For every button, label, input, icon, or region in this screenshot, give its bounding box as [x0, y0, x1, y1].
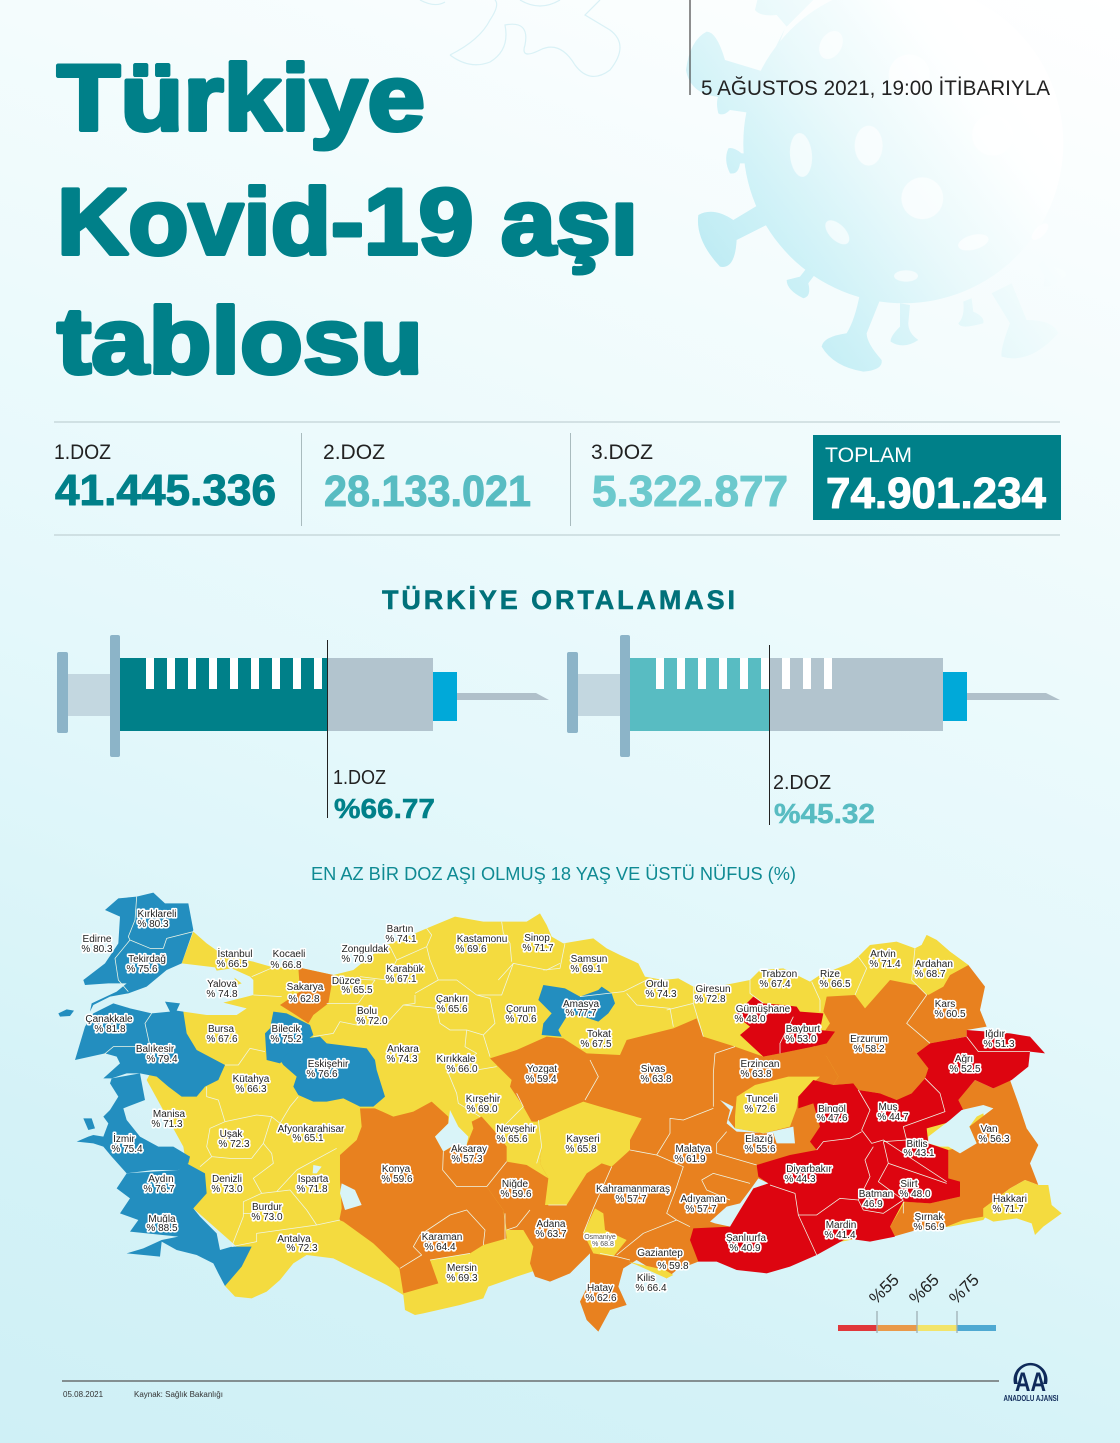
map: province labels west: % 67.1	[385, 974, 417, 985]
map: province labels west: Balıkesir	[136, 1044, 175, 1055]
map: blue provinces west (over 75%)	[58, 893, 385, 1286]
map: province labels west: % 70.6	[505, 1014, 537, 1025]
map: province labels west: % 69.0	[466, 1104, 498, 1115]
map: province labels west: % 59.6	[381, 1174, 413, 1185]
map: province labels east: % 56.3	[978, 1134, 1010, 1145]
map: province labels west: % 79.4	[146, 1054, 178, 1065]
map: province labels west: % 66.0	[446, 1064, 478, 1075]
map: province labels east: Şanlıurfa	[726, 1233, 766, 1244]
dose 2 percentage callout: 2.DOZ	[773, 772, 831, 794]
map: province labels west: Afyonkarahisar	[278, 1124, 345, 1135]
map: province labels west: % 81.8	[94, 1024, 126, 1035]
dose 1 total: 1.DOZ	[54, 441, 111, 464]
map: province labels west: % 66.5	[216, 959, 248, 970]
map: province labels east: % 66.5	[819, 979, 851, 990]
map: province labels east: % 72.8	[694, 994, 726, 1005]
map: province labels east: Gümüşhane	[736, 1004, 791, 1015]
date stamp: 5 AĞUSTOS 2021, 19:00 İTİBARIYLA	[701, 77, 1050, 100]
map: province labels west: Yalova	[207, 979, 237, 990]
dose 2 percentage callout: %45.32	[774, 798, 875, 829]
map: province labels west: % 75.2	[270, 1034, 302, 1045]
map: province labels east: Rize	[820, 969, 840, 980]
map: province labels east: Ordu	[646, 979, 668, 990]
yellow provinces on top of orange	[537, 935, 1062, 1278]
map: province labels west: % 71.7	[522, 943, 554, 954]
map: province labels west: % 65.1	[292, 1133, 324, 1144]
map: province labels west: Burdur	[252, 1202, 283, 1213]
map: province labels east: % 44.3	[784, 1174, 816, 1185]
map: province labels west: Manisa	[153, 1109, 186, 1120]
map: province labels west: % 69.6	[455, 944, 487, 955]
dose 1 total	[54, 441, 276, 515]
map: province labels east: Sivas	[641, 1064, 665, 1075]
map: province labels west: % 65.5	[341, 985, 373, 996]
map: province labels east: Erzurum	[850, 1034, 888, 1045]
map: province labels west: % 88.5	[146, 1223, 178, 1234]
map: province labels west: % 72.3	[286, 1243, 318, 1254]
total box: TOPLAM	[825, 444, 912, 467]
dose 1 percentage callout: %66.77	[334, 793, 435, 824]
central and eastern orange provinces	[487, 965, 1038, 1332]
map: province labels east: Kahramanmaraş	[596, 1184, 670, 1195]
map: province labels east: Trabzon	[761, 969, 797, 980]
map: province labels west: Kütahya	[233, 1074, 270, 1085]
map: province labels east: % 47.6	[816, 1113, 848, 1124]
map: province labels east: % 62.6	[585, 1293, 617, 1304]
map: province labels east: % 40.9	[729, 1243, 761, 1254]
map: province labels west: Eskişehir	[308, 1059, 349, 1070]
map: province labels west: % 74.1	[385, 934, 417, 945]
red provinces (under 55%)	[690, 997, 1045, 1273]
map: province labels west: Tekirdağ	[128, 954, 166, 965]
map: province labels west: % 73.0	[251, 1212, 283, 1223]
dose 3 total	[591, 441, 788, 516]
map: province labels west: % 76.7	[143, 1184, 175, 1195]
faint outline virus at top	[420, 0, 620, 76]
map: province labels west: % 66.8	[270, 960, 302, 971]
map: province labels east: % 69.1	[570, 964, 602, 975]
map: province labels west: % 75.4	[111, 1144, 143, 1155]
map: province labels west: % 63.7	[535, 1229, 567, 1240]
Anadolu Ajansı logo: AA	[1015, 1367, 1046, 1397]
total box	[813, 435, 1061, 520]
dose 2 total	[323, 441, 531, 516]
map: province labels west: İzmir	[113, 1132, 135, 1145]
map: province labels west: % 69.3	[446, 1273, 478, 1284]
map: province labels west: % 74.3	[386, 1054, 418, 1065]
map: province labels west: Sinop	[524, 933, 550, 944]
map: province labels east: % 43.1	[903, 1148, 935, 1159]
map: province labels west: Uşak	[220, 1129, 243, 1140]
map legend: %55	[865, 1270, 903, 1308]
map: province labels west: % 74.8	[206, 989, 238, 1000]
map: province labels west: % 71.3	[151, 1119, 183, 1130]
blue province: Amasya	[538, 985, 615, 1037]
map: province labels west: İstanbul	[217, 947, 253, 960]
map: province labels east: Kilis	[637, 1273, 655, 1284]
title	[57, 45, 638, 393]
map: province labels east: Kars	[935, 999, 955, 1010]
map: province labels west: % 75.6	[126, 964, 158, 975]
dose 2 percentage callout	[770, 645, 875, 829]
map: province labels east: % 59.8	[657, 1261, 689, 1272]
map: province labels west: Adana	[537, 1219, 566, 1230]
map: province labels east: Şırnak	[915, 1212, 944, 1223]
map: province labels west: Bilecik	[272, 1024, 301, 1035]
map: province labels east: % 67.4	[759, 979, 791, 990]
map legend: %65	[905, 1270, 943, 1308]
map: province labels east: % 77.7	[565, 1008, 597, 1019]
virus illustration	[686, 0, 1067, 372]
map: province labels west: Sakarya	[287, 982, 324, 993]
map: province labels east: Artvin	[870, 949, 896, 960]
map: province labels east: % 48.0	[734, 1014, 766, 1025]
map: province labels west: Zonguldak	[342, 944, 389, 955]
map: province labels east: % 71.7	[992, 1204, 1024, 1215]
map: province labels east: Bingöl	[818, 1104, 846, 1115]
map: province labels east: Hatay	[587, 1283, 613, 1294]
map: province labels west: Bolu	[357, 1006, 377, 1017]
map: province labels west: Aksaray	[451, 1144, 487, 1155]
map: province labels east: Giresun	[695, 984, 731, 995]
map: province labels west: Aydın	[148, 1174, 174, 1185]
map: province labels west: Antalya	[277, 1234, 311, 1245]
dose 2 total: 2.DOZ	[323, 441, 385, 464]
syringe: dose 2	[567, 635, 1060, 757]
map: province labels east: Mardin	[826, 1220, 856, 1231]
map: province labels west: Ankara	[387, 1044, 419, 1055]
map: province labels east: Malatya	[675, 1144, 711, 1155]
map: yellow base (65-75%)	[147, 913, 1000, 1315]
map: province labels west: % 70.9	[341, 954, 373, 965]
map: province labels west: Çorum	[506, 1004, 536, 1015]
dose 1 percentage callout	[328, 640, 435, 824]
map: province labels west: % 80.3	[137, 919, 169, 930]
map: province labels east: % 58.2	[853, 1044, 885, 1055]
map: province labels east: Gaziantep	[637, 1248, 683, 1259]
map: province labels west: Çankırı	[436, 994, 468, 1005]
dose 3 total: 3.DOZ	[591, 441, 653, 464]
map: province labels west: Bursa	[208, 1024, 234, 1035]
map: province labels west: % 76.6	[306, 1069, 338, 1080]
total box: 74.901.234	[826, 469, 1047, 518]
map: province labels west: Isparta	[298, 1174, 329, 1185]
map: province labels west: Nevşehir	[496, 1124, 536, 1135]
map: province labels west: % 57.3	[451, 1154, 483, 1165]
map legend	[838, 1270, 996, 1333]
map: province labels east: % 63.8	[640, 1074, 672, 1085]
title: tablosu	[57, 288, 423, 393]
map: province labels west: Niğde	[502, 1179, 528, 1190]
map: province labels east: Ağrı	[955, 1054, 973, 1065]
map: province labels east: % 74.3	[645, 989, 677, 1000]
map: province labels east: % 52.5	[949, 1064, 981, 1075]
map: province labels west: % 66.3	[235, 1084, 267, 1095]
map: province labels east: Van	[980, 1124, 998, 1135]
map: province labels east: Tunceli	[746, 1094, 778, 1105]
heading: Türkiye average: TÜRKİYE ORTALAMASI	[382, 585, 735, 615]
map: province labels west: Karabük	[386, 964, 425, 975]
map: province labels east: % 72.6	[744, 1104, 776, 1115]
map: province labels east: Batman	[859, 1189, 893, 1200]
map: province labels west: % 71.8	[296, 1184, 328, 1195]
map: province labels east: % 66.4	[635, 1283, 667, 1294]
map: province labels west: Düzce	[332, 976, 361, 987]
map: province labels west: Çanakkale	[85, 1014, 133, 1025]
map: province labels west: % 62.8	[288, 994, 320, 1005]
dose totals panel	[54, 422, 1061, 535]
map: province labels east	[563, 949, 1027, 1304]
map: province labels east: % 61.9	[674, 1154, 706, 1165]
map: province labels east: % 65.8	[565, 1144, 597, 1155]
map: province labels east: Samsun	[571, 954, 607, 965]
map: province labels west: Muğla	[148, 1214, 176, 1225]
map: province labels west: Mersin	[447, 1263, 477, 1274]
map: province labels west: % 65.6	[436, 1004, 468, 1015]
map: orange provinces west (55-65%)	[280, 967, 507, 1293]
map: province labels west: % 64.4	[424, 1242, 456, 1253]
map subtitle: EN AZ BİR DOZ AŞI OLMUŞ 18 YAŞ VE ÜSTÜ NÜFUS (%)	[311, 864, 796, 884]
map: province labels west: Kırklareli	[138, 909, 176, 920]
map: province labels east: 46.9	[863, 1199, 883, 1210]
Anadolu Ajansı logo	[1004, 1363, 1058, 1403]
map: province labels east: % 67.5	[580, 1039, 612, 1050]
map: province labels east: Muş	[879, 1102, 897, 1113]
map: province labels west: % 65.6	[496, 1134, 528, 1145]
map: province labels east: Ardahan	[915, 959, 953, 970]
dose 1 percentage callout: 1.DOZ	[333, 767, 386, 789]
map: province labels west: % 72.0	[356, 1016, 388, 1027]
map: province labels west: % 73.0	[211, 1184, 243, 1195]
map: province labels east: Diyarbakır	[786, 1164, 832, 1175]
map: province labels west: Yozgat	[527, 1064, 557, 1075]
map: province labels east: % 63.8	[740, 1069, 772, 1080]
map: province labels east: Erzincan	[741, 1059, 779, 1070]
Anadolu Ajansı logo: ANADOLU AJANSI	[1004, 1394, 1058, 1403]
footer source line: Kaynak: Sağlık Bakanlığı	[134, 1390, 223, 1399]
map: province labels east: % 41.4	[824, 1230, 856, 1241]
map: province labels west: % 67.6	[206, 1034, 238, 1045]
map: province labels east: Hakkari	[993, 1194, 1027, 1205]
map: province labels east: Iğdır	[985, 1029, 1006, 1040]
map: province labels west	[81, 909, 567, 1284]
map: province labels west: Kastamonu	[457, 934, 507, 945]
map: province labels west: % 59.4	[525, 1074, 557, 1085]
map: province labels east: % 55.6	[744, 1144, 776, 1155]
map: province labels west: Kırıkkale	[437, 1054, 476, 1065]
map: province labels east: % 44.7	[877, 1112, 909, 1123]
map: province labels west: Konya	[382, 1164, 411, 1175]
syringe: dose 1	[57, 635, 549, 757]
map: province labels west: Kırşehir	[466, 1094, 501, 1105]
map: province labels east: Bayburt	[786, 1024, 820, 1035]
map: province borders	[103, 897, 560, 1268]
map: province labels east: % 68.8	[592, 1241, 614, 1248]
map: east provinces	[487, 935, 1062, 1332]
map: province labels east: % 57.7	[615, 1194, 647, 1205]
footer source line: 05.08.2021	[63, 1390, 104, 1399]
map: province labels east: % 48.0	[899, 1189, 931, 1200]
dose 1 total: 41.445.336	[55, 466, 276, 515]
map: province labels west: % 72.3	[218, 1139, 250, 1150]
map: province labels east: % 57.7	[685, 1204, 717, 1215]
map: province labels east: % 51.3	[983, 1039, 1015, 1050]
map: province labels east: Adıyaman	[680, 1194, 726, 1205]
map legend: %75	[945, 1270, 983, 1308]
map: lakes and dams	[313, 1100, 993, 1227]
map: province labels west: % 59.6	[500, 1189, 532, 1200]
map: province labels east: % 60.5	[934, 1009, 966, 1020]
map: province labels east: Amasya	[563, 999, 599, 1010]
map: province labels east: % 71.4	[869, 959, 901, 970]
map: province labels east: % 53.0	[785, 1034, 817, 1045]
map: province labels east: Tokat	[587, 1029, 611, 1040]
map: province labels east: Elazığ	[745, 1134, 773, 1145]
map: province labels east: Siirt	[900, 1179, 918, 1190]
title: Türkiye	[57, 45, 425, 150]
map: province labels west: Edirne	[83, 934, 112, 945]
map: province labels east: Osmaniye	[584, 1234, 616, 1241]
title: Kovid-19 aşı	[57, 169, 638, 274]
map: province labels west: Karaman	[422, 1232, 462, 1243]
dose 3 total: 5.322.877	[592, 467, 788, 516]
map: province labels west: % 80.3	[81, 944, 113, 955]
choropleth map of Türkiye	[58, 893, 1062, 1332]
dose 2 total: 28.133.021	[324, 467, 531, 516]
map: province labels west: Kocaeli	[273, 949, 305, 960]
map: province labels east: % 68.7	[914, 969, 946, 980]
map: province labels west: Denizli	[212, 1174, 242, 1185]
map: province labels west: Bartın	[387, 924, 413, 935]
map: province labels east: Bitlis	[906, 1139, 928, 1150]
map: province labels east: Kayseri	[566, 1134, 600, 1145]
footer source line	[62, 1381, 999, 1399]
map: province labels east: % 56.9	[913, 1222, 945, 1233]
